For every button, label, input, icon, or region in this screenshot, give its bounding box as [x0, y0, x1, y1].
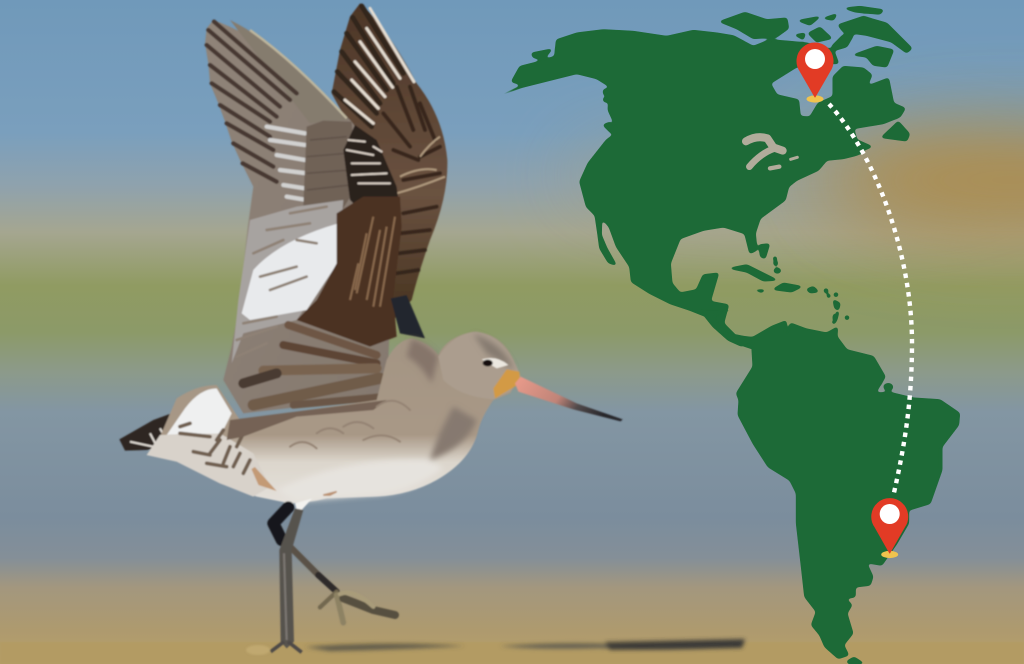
mainland north and central america: [497, 30, 905, 350]
folded leg: [273, 507, 395, 623]
great lakes: [746, 137, 797, 168]
trinidad and lesser antilles: [832, 312, 839, 324]
tierra del fuego: [847, 657, 863, 664]
map: South America: [700, 310, 959, 664]
black shoulder: [391, 295, 425, 338]
central american isthmus: [700, 310, 757, 346]
orange face patch: [493, 369, 520, 398]
mottled rump and flank: [167, 388, 232, 437]
tail: [119, 408, 197, 451]
bill: [515, 377, 623, 421]
back wing: right wing with dark feathers: [332, 3, 447, 320]
legs and feet: [271, 498, 395, 652]
bird: black-tailed godwit: [119, 3, 623, 655]
pacific islands: [603, 88, 609, 95]
lower flight feathers: [243, 325, 383, 405]
migration route: dotted arc: [829, 104, 912, 497]
baja california: [595, 215, 616, 265]
head: [438, 332, 521, 399]
body: [119, 332, 623, 503]
map: North America: [497, 7, 912, 350]
barred dark coverts: [343, 125, 400, 213]
eye: [483, 360, 493, 366]
amazon island: [884, 384, 893, 390]
alaska island: [532, 49, 552, 59]
map pin: wintering grounds, Argentina: [872, 499, 908, 558]
south american mainland: [737, 321, 959, 658]
caribbean islands: [730, 265, 777, 281]
newfoundland: [882, 122, 909, 141]
arctic islands: [720, 13, 788, 38]
map pin: breeding grounds, Hudson Bay: [797, 43, 833, 103]
sand mound at foot: [246, 645, 270, 655]
ground shadows of the bird: [305, 639, 745, 651]
front wing: grey and white underside: [205, 20, 425, 413]
eye stripe: [482, 358, 508, 368]
